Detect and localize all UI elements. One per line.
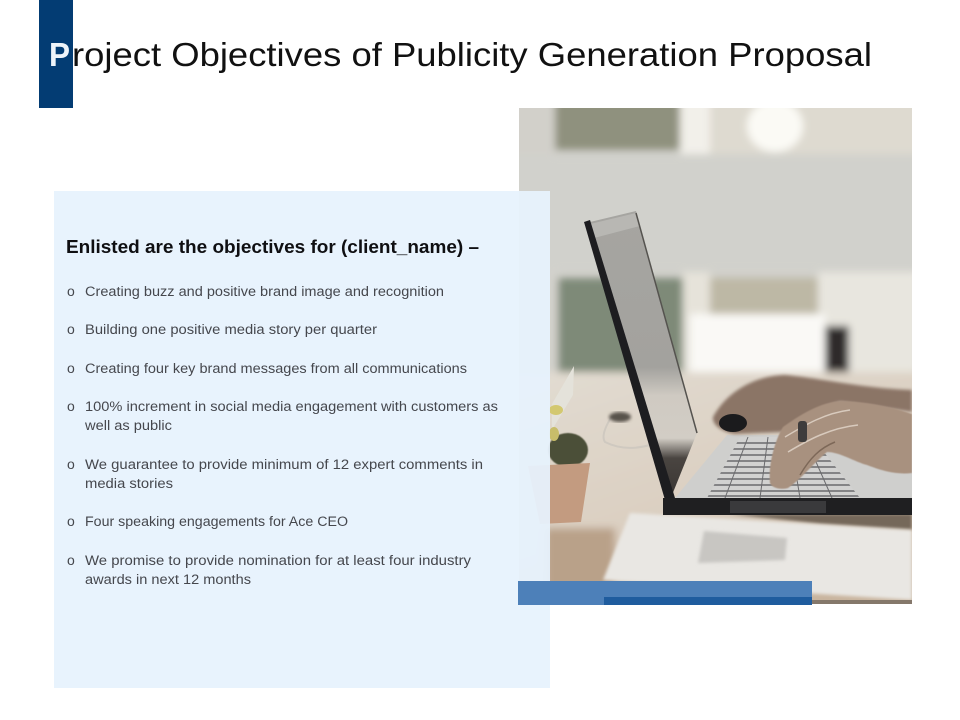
photo: mouse cable	[604, 416, 650, 448]
photo: paper on desk	[603, 513, 912, 600]
objectives list: o	[67, 552, 75, 568]
title: roject Objectives of Publicity Generation Proposal	[72, 36, 872, 73]
photo: shadow under laptop	[730, 514, 912, 530]
blue accent bar	[518, 581, 812, 605]
photo background: blurred office	[550, 108, 912, 600]
objectives list: o	[67, 283, 75, 299]
objectives list: Four speaking engagements for Ace CEO	[85, 514, 348, 529]
objectives list: awards in next 12 months	[85, 572, 251, 587]
objectives list: o	[67, 321, 75, 337]
objectives list: o	[67, 456, 75, 472]
objectives list: Creating buzz and positive brand image and recognition	[85, 284, 444, 299]
objectives list: o	[67, 360, 75, 376]
panel heading: Enlisted are the objectives for (client_name) –	[66, 237, 479, 257]
objectives list: o	[67, 513, 75, 529]
title: P	[49, 36, 70, 73]
photo: laptop	[584, 211, 912, 515]
objectives list: o	[67, 398, 75, 414]
objectives list: We promise to provide nomination for at least four industry	[85, 553, 471, 568]
objectives list: well as public	[84, 418, 172, 433]
photo: hands typing on laptop	[510, 100, 920, 612]
photo: plant and pot	[549, 366, 590, 524]
photo: hands	[713, 375, 912, 489]
objectives list: We guarantee to provide minimum of 12 expert comments in	[85, 457, 483, 472]
header accent bar	[39, 0, 73, 108]
panel: objectives	[54, 191, 550, 688]
objectives list: media stories	[85, 476, 173, 491]
objectives list: Building one positive media story per quarter	[85, 322, 378, 337]
objectives list: Creating four key brand messages from all communications	[85, 361, 467, 376]
objectives list: 100% increment in social media engagement with customers as	[85, 399, 498, 414]
objectives list	[67, 283, 498, 587]
